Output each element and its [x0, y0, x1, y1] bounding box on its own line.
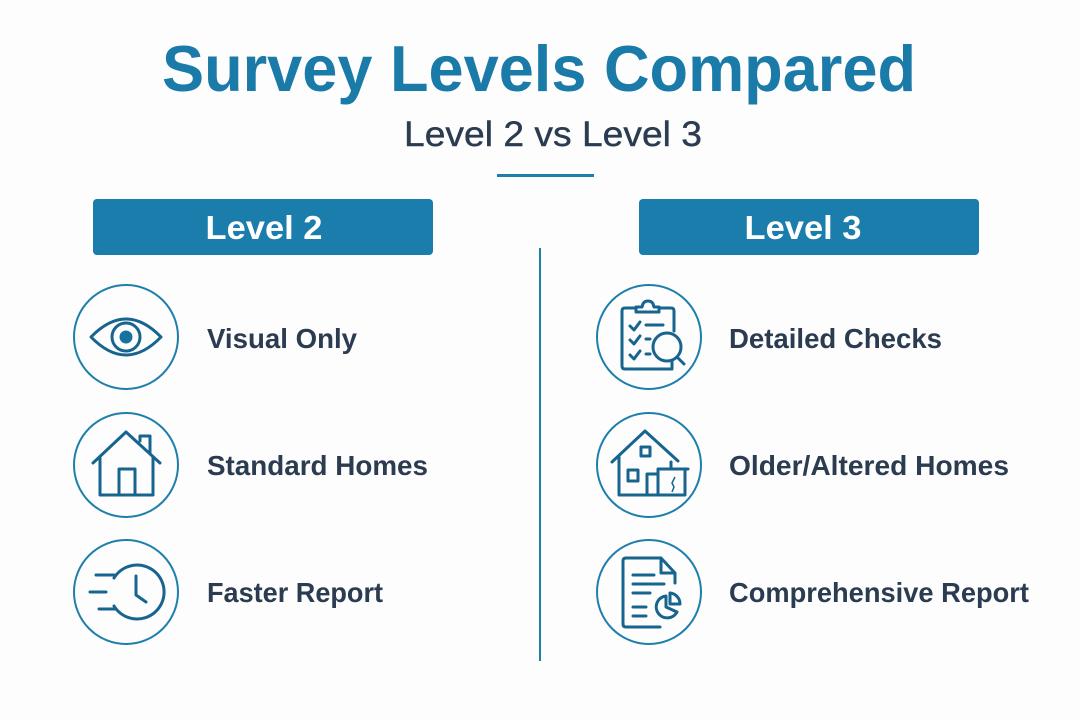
icon: clipboard with magnifier [597, 285, 701, 389]
panel: Level 3 column [597, 199, 1029, 644]
icon: fast clock [74, 540, 178, 644]
label: Faster Report: Faster Report [207, 577, 383, 608]
icon: report with pie chart [597, 540, 701, 644]
label: Detailed Checks: Detailed Checks [729, 323, 942, 354]
Level 3 header [639, 199, 979, 255]
icon: eye [74, 285, 178, 389]
Level 2 header: Level 2 [206, 209, 322, 246]
Level 2 header [93, 199, 433, 255]
label: Older/Altered Homes: Older/Altered Homes [729, 450, 1009, 481]
icon: house [74, 413, 178, 517]
Level 3 header: Level 3 [744, 209, 862, 246]
label: Visual Only: Visual Only [207, 323, 357, 354]
label: Comprehensive Report: Comprehensive Report [729, 577, 1029, 608]
title: Survey Levels Compared [162, 32, 916, 105]
icon: older altered house [597, 413, 701, 517]
panel: Level 2 column [74, 199, 433, 644]
divider [539, 248, 541, 661]
label: Standard Homes: Standard Homes [207, 450, 428, 481]
subtitle: Level 2 vs Level 3 [404, 115, 702, 154]
